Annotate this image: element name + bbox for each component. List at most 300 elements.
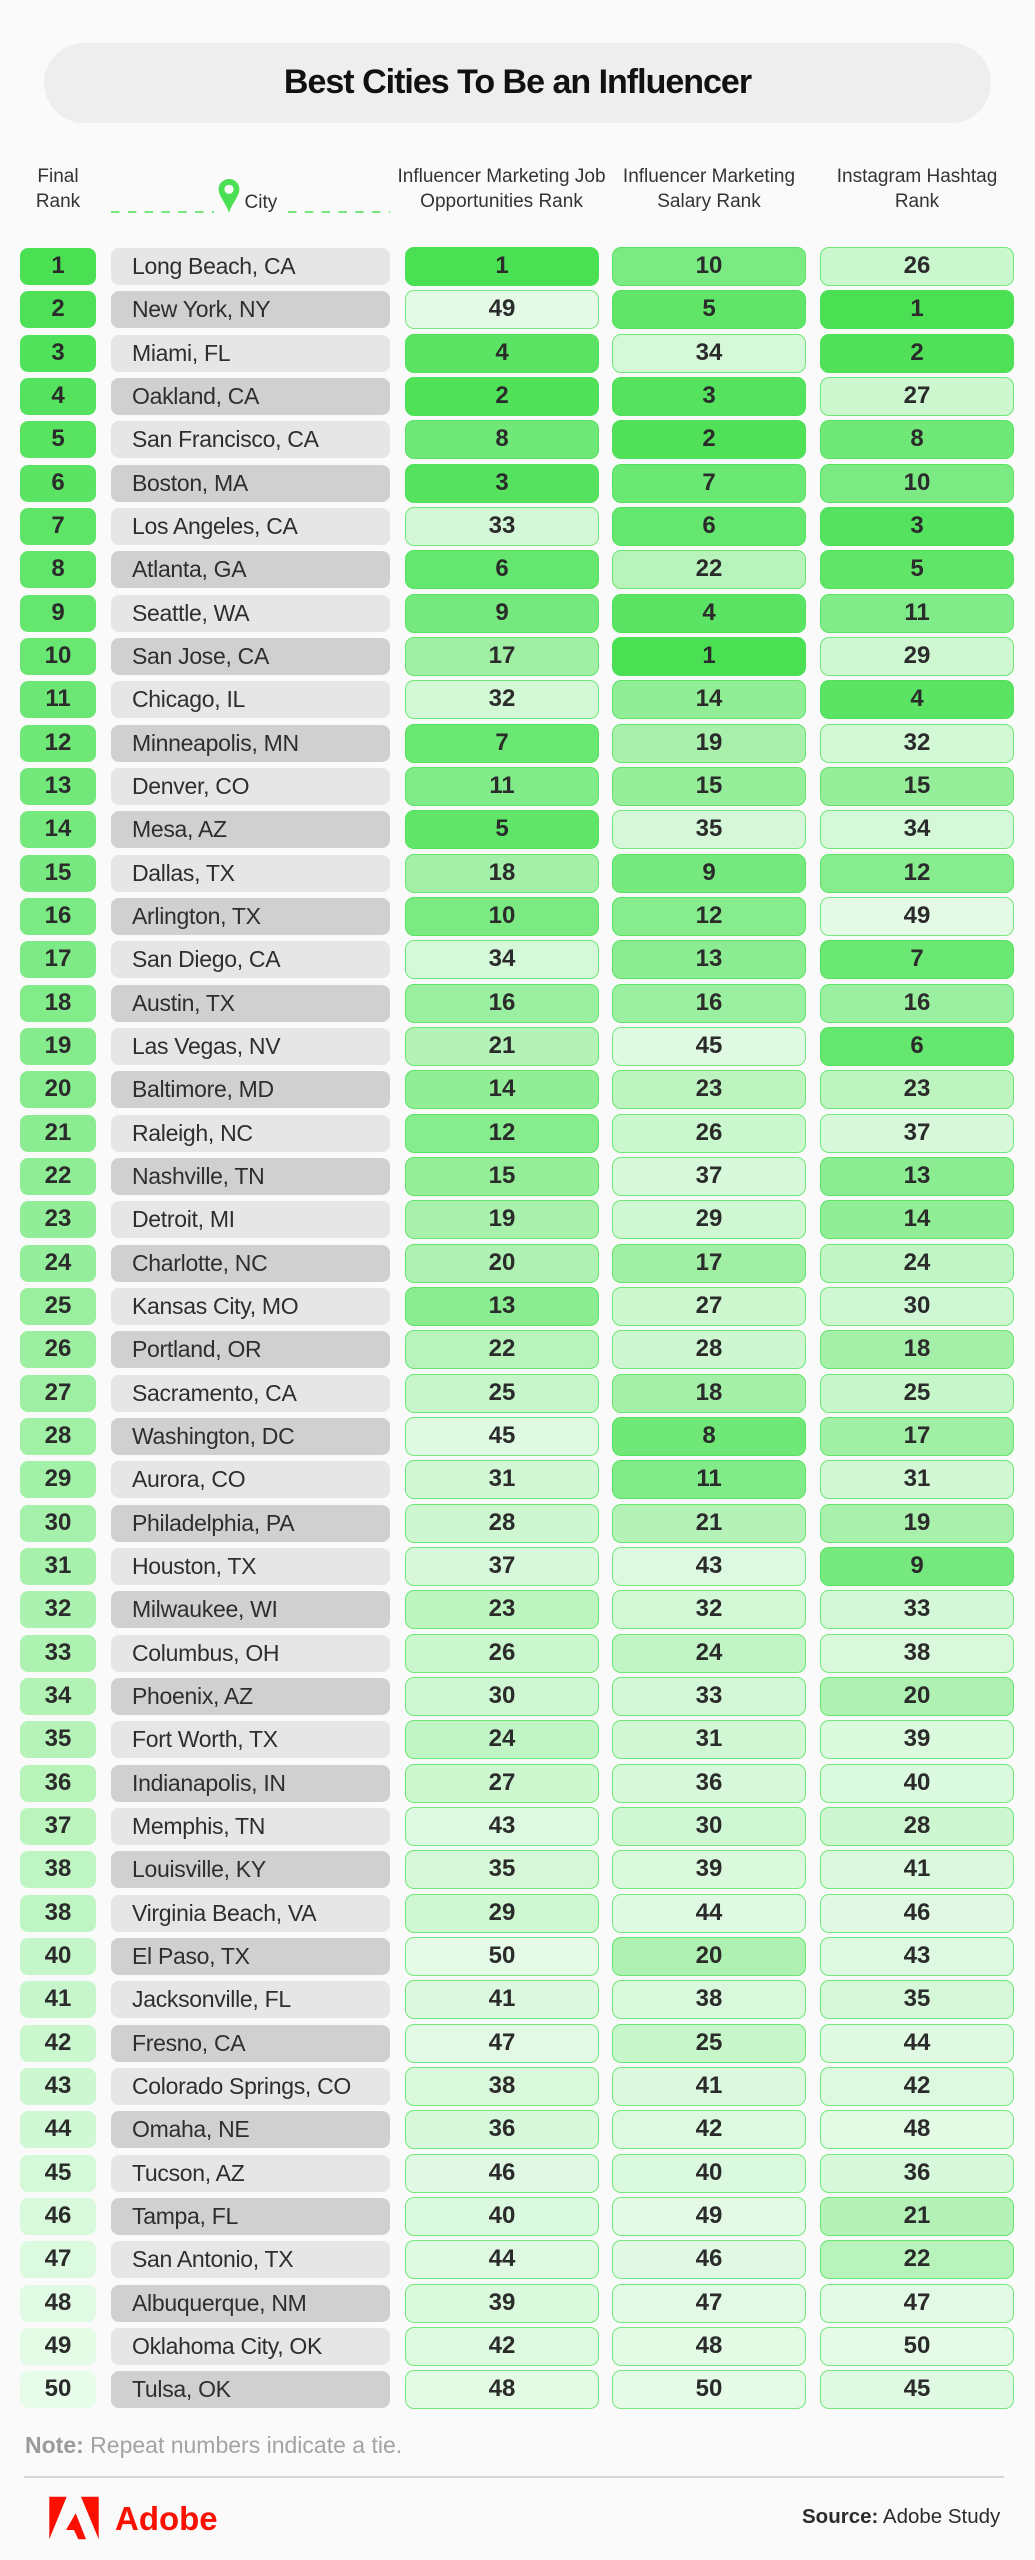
row 10: 17 xyxy=(489,642,515,669)
row 15: 9 xyxy=(702,859,716,886)
row 24: Charlotte, NC xyxy=(132,1250,267,1276)
row 18: 16 xyxy=(696,989,722,1016)
row 35: 39 xyxy=(904,1725,930,1752)
row 12: 12 xyxy=(45,729,71,756)
row 47 xyxy=(0,2241,1035,2279)
row 19: Las Vegas, NV xyxy=(132,1033,280,1059)
row 37 xyxy=(0,1808,1035,1846)
row 27 xyxy=(20,1374,1014,1413)
row 10: 10 xyxy=(45,642,71,669)
row 42: 47 xyxy=(489,2029,515,2056)
row 5 xyxy=(20,420,1014,459)
row 32: Milwaukee, WI xyxy=(132,1596,278,1622)
row 37: 30 xyxy=(696,1812,722,1839)
row 35: 24 xyxy=(489,1725,515,1752)
row 42: 44 xyxy=(904,2029,930,2056)
row 6: 6 xyxy=(51,469,65,496)
row 40: El Paso, TX xyxy=(132,1943,250,1969)
row 7 xyxy=(20,507,1014,546)
row 4: 3 xyxy=(702,382,716,409)
row 3: 2 xyxy=(910,339,924,366)
row 9 xyxy=(20,594,1014,633)
row 1 xyxy=(20,247,1014,286)
column header: final rank: Rank xyxy=(36,191,80,212)
row 42: 25 xyxy=(696,2029,722,2056)
row 40: 20 xyxy=(696,1942,722,1969)
row 26: 28 xyxy=(696,1335,722,1362)
row 31: 9 xyxy=(910,1552,924,1579)
row 32 xyxy=(20,1590,1014,1629)
row 31: 31 xyxy=(45,1552,71,1579)
row 44 xyxy=(0,2111,1035,2149)
row 16: Arlington, TX xyxy=(132,903,261,929)
row 22: Nashville, TN xyxy=(132,1163,264,1189)
row 29: 29 xyxy=(45,1465,71,1492)
title: Best Cities To Be an Influencer xyxy=(284,63,751,101)
row 46 xyxy=(0,2198,1035,2236)
column header: hashtag rank: Rank xyxy=(895,191,939,212)
row 30: 21 xyxy=(696,1509,722,1536)
row 43: 38 xyxy=(489,2072,515,2099)
row 19 xyxy=(20,1027,1014,1066)
row 31: Houston, TX xyxy=(132,1553,256,1579)
column header: job opportunities rank xyxy=(397,166,606,212)
row 8 xyxy=(20,550,1014,589)
row 30: 28 xyxy=(489,1509,515,1536)
icon: Adobe logo xyxy=(49,2496,100,2540)
row 23: Detroit, MI xyxy=(132,1206,235,1232)
row 33: 24 xyxy=(696,1639,722,1666)
column header: hashtag rank: Instagram Hashtag xyxy=(837,166,997,187)
row 32: 23 xyxy=(489,1595,515,1622)
row 8: 8 xyxy=(51,555,65,582)
row 28: 28 xyxy=(45,1422,71,1449)
row 45: 46 xyxy=(489,2159,515,2186)
row 43: 41 xyxy=(696,2072,722,2099)
row 38: 39 xyxy=(696,1855,722,1882)
row 45: 40 xyxy=(696,2159,722,2186)
row 3: Miami, FL xyxy=(132,340,230,366)
column header: salary rank xyxy=(623,166,795,212)
row 9: 9 xyxy=(51,599,65,626)
row 14: 35 xyxy=(696,815,722,842)
row 48: Albuquerque, NM xyxy=(132,2290,306,2316)
row 46: 49 xyxy=(696,2202,722,2229)
row 20 xyxy=(20,1070,1014,1109)
row 29: 11 xyxy=(696,1465,722,1492)
row 45: 36 xyxy=(904,2159,930,2186)
row 7: 3 xyxy=(910,512,924,539)
row 21: 21 xyxy=(45,1119,71,1146)
row 15: 12 xyxy=(904,859,930,886)
row 1: 10 xyxy=(696,252,722,279)
row 46: Tampa, FL xyxy=(132,2203,238,2229)
row 1: Long Beach, CA xyxy=(132,253,295,279)
row 14: 5 xyxy=(495,815,509,842)
row 12: 7 xyxy=(495,729,509,756)
row 23: 23 xyxy=(45,1205,71,1232)
row 35: 35 xyxy=(45,1725,71,1752)
row 41 xyxy=(0,1981,1035,2019)
row 12: 32 xyxy=(904,729,930,756)
row 17: San Diego, CA xyxy=(132,946,280,972)
row 21: 26 xyxy=(696,1119,722,1146)
row 16: 49 xyxy=(904,902,930,929)
row 47: 44 xyxy=(489,2245,515,2272)
row 25: 25 xyxy=(45,1292,71,1319)
row 42: Fresno, CA xyxy=(132,2030,245,2056)
row 20: 23 xyxy=(904,1075,930,1102)
row 37: 37 xyxy=(45,1812,71,1839)
row 36 xyxy=(0,1765,1035,1803)
row 39: 44 xyxy=(696,1899,722,1926)
row 21: 37 xyxy=(904,1119,930,1146)
row 13 xyxy=(20,767,1014,806)
row 22: 22 xyxy=(45,1162,71,1189)
row 29: 31 xyxy=(489,1465,515,1492)
row 38: 38 xyxy=(45,1855,71,1882)
row 48: 47 xyxy=(696,2289,722,2316)
column header: job opportunities rank: Influencer Marketing Job xyxy=(397,166,606,187)
row 22: 37 xyxy=(696,1162,722,1189)
row 2: 49 xyxy=(489,295,515,322)
row 13: 15 xyxy=(696,772,722,799)
column header: salary rank: Salary Rank xyxy=(657,191,761,212)
row 17: 13 xyxy=(696,945,722,972)
row 50: Tulsa, OK xyxy=(132,2376,231,2402)
row 16: 12 xyxy=(696,902,722,929)
row 2: 1 xyxy=(910,295,924,322)
row 34: 33 xyxy=(696,1682,722,1709)
row 7: Los Angeles, CA xyxy=(132,513,298,539)
row 48 xyxy=(0,2285,1035,2323)
row 27: 25 xyxy=(489,1379,515,1406)
row 34 xyxy=(20,1677,1014,1716)
row 50: 50 xyxy=(696,2375,722,2402)
row 14: 34 xyxy=(904,815,930,842)
row 49: 48 xyxy=(696,2332,722,2359)
row 46: 46 xyxy=(45,2202,71,2229)
row 28: 17 xyxy=(904,1422,930,1449)
row 33: Columbus, OH xyxy=(132,1640,279,1666)
row 14 xyxy=(20,810,1014,849)
row 48: 47 xyxy=(904,2289,930,2316)
row 13: 11 xyxy=(489,772,515,799)
row 12: Minneapolis, MN xyxy=(132,730,299,756)
row 29 xyxy=(20,1460,1014,1499)
row 5: San Francisco, CA xyxy=(132,426,319,452)
row 28 xyxy=(20,1417,1014,1456)
row 25 xyxy=(20,1287,1014,1326)
row 18: Austin, TX xyxy=(132,990,235,1016)
row 37: 43 xyxy=(489,1812,515,1839)
row 15: 18 xyxy=(489,859,515,886)
row 40: 43 xyxy=(904,1942,930,1969)
column header: city with location pin xyxy=(111,179,390,213)
row 26: 22 xyxy=(489,1335,515,1362)
row 5: 8 xyxy=(495,425,509,452)
row 20: Baltimore, MD xyxy=(132,1076,274,1102)
row 41: Jacksonville, FL xyxy=(132,1986,291,2012)
row 1: 1 xyxy=(51,252,65,279)
row 49: 50 xyxy=(904,2332,930,2359)
row 45: Tucson, AZ xyxy=(132,2160,244,2186)
row 34: 34 xyxy=(45,1682,71,1709)
row 24: 24 xyxy=(904,1249,930,1276)
column header: city with location pin: City xyxy=(244,192,278,213)
row 11: 14 xyxy=(696,685,722,712)
row 7: 7 xyxy=(51,512,65,539)
row 38: 35 xyxy=(489,1855,515,1882)
row 47: 22 xyxy=(904,2245,930,2272)
row 9: 9 xyxy=(495,599,509,626)
row 14: 14 xyxy=(45,815,71,842)
row 36: Indianapolis, IN xyxy=(132,1770,286,1796)
row 11: Chicago, IL xyxy=(132,686,245,712)
row 42: 42 xyxy=(45,2029,71,2056)
row 26: 18 xyxy=(904,1335,930,1362)
row 21: Raleigh, NC xyxy=(132,1120,253,1146)
row 6: 3 xyxy=(495,469,509,496)
row 38: Louisville, KY xyxy=(132,1856,266,1882)
row 49: 42 xyxy=(489,2332,515,2359)
row 35: 31 xyxy=(696,1725,722,1752)
row 6 xyxy=(20,464,1014,503)
row 11 xyxy=(20,680,1014,719)
row 33 xyxy=(20,1634,1014,1673)
row 36: 40 xyxy=(904,1769,930,1796)
row 40: 50 xyxy=(489,1942,515,1969)
row 17: 17 xyxy=(45,945,71,972)
row 33: 38 xyxy=(904,1639,930,1666)
row 27: Sacramento, CA xyxy=(132,1380,297,1406)
row 20: 20 xyxy=(45,1075,71,1102)
row 23 xyxy=(20,1200,1014,1239)
row 15: 15 xyxy=(45,859,71,886)
row 30: Philadelphia, PA xyxy=(132,1510,294,1536)
row 41: 35 xyxy=(904,1985,930,2012)
row 46: 40 xyxy=(489,2202,515,2229)
row 13: 13 xyxy=(45,772,71,799)
row 36: 36 xyxy=(696,1769,722,1796)
row 21: 12 xyxy=(489,1119,515,1146)
row 47: 46 xyxy=(696,2245,722,2272)
row 36: 36 xyxy=(45,1769,71,1796)
row 1: 1 xyxy=(495,252,509,279)
row 3: 34 xyxy=(696,339,722,366)
row 24: 24 xyxy=(45,1249,71,1276)
row 44: Omaha, NE xyxy=(132,2116,249,2142)
row 19: 45 xyxy=(696,1032,722,1059)
Adobe wordmark: Adobe xyxy=(115,2500,218,2537)
row 44: 42 xyxy=(696,2115,722,2142)
row 31: 37 xyxy=(489,1552,515,1579)
row 39: Virginia Beach, VA xyxy=(132,1900,316,1926)
source: Source: Adobe Study xyxy=(802,2505,1000,2528)
row 8: Atlanta, GA xyxy=(132,556,246,582)
column header: final rank: Final xyxy=(37,166,79,187)
row 36: 27 xyxy=(489,1769,515,1796)
row 9: 4 xyxy=(702,599,716,626)
row 5: 2 xyxy=(702,425,716,452)
row 50: 48 xyxy=(489,2375,515,2402)
row 35: Fort Worth, TX xyxy=(132,1726,278,1752)
row 4: 4 xyxy=(51,382,65,409)
row 18 xyxy=(20,984,1014,1023)
row 9: 11 xyxy=(904,599,930,626)
row 45: 45 xyxy=(45,2159,71,2186)
row 4 xyxy=(20,377,1014,416)
row 48: 39 xyxy=(489,2289,515,2316)
row 37: 28 xyxy=(904,1812,930,1839)
row 37: Memphis, TN xyxy=(132,1813,265,1839)
row 11: 32 xyxy=(489,685,515,712)
row 31 xyxy=(20,1547,1014,1586)
row 49: Oklahoma City, OK xyxy=(132,2333,322,2359)
row 32: 32 xyxy=(45,1595,71,1622)
row 40 xyxy=(0,1938,1035,1976)
row 27: 27 xyxy=(45,1379,71,1406)
row 8: 5 xyxy=(910,555,924,582)
row 46: 21 xyxy=(904,2202,930,2229)
row 17: 7 xyxy=(910,945,924,972)
row 29: Aurora, CO xyxy=(132,1466,245,1492)
row 4: Oakland, CA xyxy=(132,383,259,409)
row 43: Colorado Springs, CO xyxy=(132,2073,351,2099)
row 20: 14 xyxy=(489,1075,515,1102)
row 30 xyxy=(20,1504,1014,1543)
row 19: 21 xyxy=(489,1032,515,1059)
column header: final rank xyxy=(36,166,80,212)
row 22: 13 xyxy=(904,1162,930,1189)
row 44: 44 xyxy=(45,2115,71,2142)
row 18: 16 xyxy=(904,989,930,1016)
row 19: 6 xyxy=(910,1032,924,1059)
row 38: 41 xyxy=(904,1855,930,1882)
row 34: 30 xyxy=(489,1682,515,1709)
row 32: 33 xyxy=(904,1595,930,1622)
row 3: 4 xyxy=(495,339,509,366)
row 2 xyxy=(20,290,1014,329)
row 10: 29 xyxy=(904,642,930,669)
row 45 xyxy=(0,2155,1035,2193)
row 9: Seattle, WA xyxy=(132,600,249,626)
row 24 xyxy=(20,1244,1014,1283)
row 49: 49 xyxy=(45,2332,71,2359)
row 49 xyxy=(0,2328,1035,2366)
row 7: 6 xyxy=(702,512,716,539)
row 11: 11 xyxy=(45,685,71,712)
row 27: 18 xyxy=(696,1379,722,1406)
row 20: 23 xyxy=(696,1075,722,1102)
row 41: 38 xyxy=(696,1985,722,2012)
row 25: 13 xyxy=(489,1292,515,1319)
row 48: 48 xyxy=(45,2289,71,2316)
row 13: 15 xyxy=(904,772,930,799)
row 16: 10 xyxy=(489,902,515,929)
row 1: 26 xyxy=(904,252,930,279)
row 16: 16 xyxy=(45,902,71,929)
row 6: 10 xyxy=(904,469,930,496)
row 25: 27 xyxy=(696,1292,722,1319)
row 42 xyxy=(0,2025,1035,2063)
row 2: 5 xyxy=(702,295,716,322)
row 44: 48 xyxy=(904,2115,930,2142)
row 12 xyxy=(20,724,1014,763)
row 34: Phoenix, AZ xyxy=(132,1683,253,1709)
row 39: 46 xyxy=(904,1899,930,1926)
row 15 xyxy=(20,854,1014,893)
row 28: 45 xyxy=(489,1422,515,1449)
row 16 xyxy=(20,897,1014,936)
row 7: 33 xyxy=(489,512,515,539)
row 47: San Antonio, TX xyxy=(132,2246,293,2272)
icon: location pin xyxy=(219,179,239,213)
row 50: 45 xyxy=(904,2375,930,2402)
row 17: 34 xyxy=(489,945,515,972)
column header: hashtag rank xyxy=(837,166,997,212)
row 28: Washington, DC xyxy=(132,1423,294,1449)
row 30: 19 xyxy=(904,1509,930,1536)
row 19: 19 xyxy=(45,1032,71,1059)
row 23: 29 xyxy=(696,1205,722,1232)
row 43 xyxy=(0,2068,1035,2106)
column header: salary rank: Influencer Marketing xyxy=(623,166,795,187)
row 11: 4 xyxy=(910,685,924,712)
row 44: 36 xyxy=(489,2115,515,2142)
row 29: 31 xyxy=(904,1465,930,1492)
row 3: 3 xyxy=(51,339,65,366)
row 18: 18 xyxy=(45,989,71,1016)
row 2: 2 xyxy=(51,295,65,322)
row 26 xyxy=(20,1330,1014,1369)
row 40: 40 xyxy=(45,1942,71,1969)
row 26: 26 xyxy=(45,1335,71,1362)
row 10: San Jose, CA xyxy=(132,643,269,669)
row 24: 20 xyxy=(489,1249,515,1276)
row 39: 29 xyxy=(489,1899,515,1926)
row 4: 27 xyxy=(904,382,930,409)
row 14: Mesa, AZ xyxy=(132,816,227,842)
row 23: 14 xyxy=(904,1205,930,1232)
row 33: 33 xyxy=(45,1639,71,1666)
row 22: 15 xyxy=(489,1162,515,1189)
row 34: 20 xyxy=(904,1682,930,1709)
row 23: 19 xyxy=(489,1205,515,1232)
row 10 xyxy=(20,637,1014,676)
row 21 xyxy=(20,1114,1014,1153)
row 25: 30 xyxy=(904,1292,930,1319)
row 3 xyxy=(20,334,1014,373)
row 5: 5 xyxy=(51,425,65,452)
row 31: 43 xyxy=(696,1552,722,1579)
row 47: 47 xyxy=(45,2245,71,2272)
row 15: Dallas, TX xyxy=(132,860,235,886)
row 43: 43 xyxy=(45,2072,71,2099)
note: Note: Repeat numbers indicate a tie. xyxy=(25,2432,402,2458)
row 5: 8 xyxy=(910,425,924,452)
row 6: Boston, MA xyxy=(132,470,248,496)
row 10: 1 xyxy=(702,642,716,669)
row 39: 38 xyxy=(45,1899,71,1926)
row 18: 16 xyxy=(489,989,515,1016)
row 13: Denver, CO xyxy=(132,773,249,799)
row 2: New York, NY xyxy=(132,296,270,322)
row 32: 32 xyxy=(696,1595,722,1622)
row 6: 7 xyxy=(702,469,716,496)
column header: job opportunities rank: Opportunities Rank xyxy=(420,191,583,212)
row 50: 50 xyxy=(45,2375,71,2402)
